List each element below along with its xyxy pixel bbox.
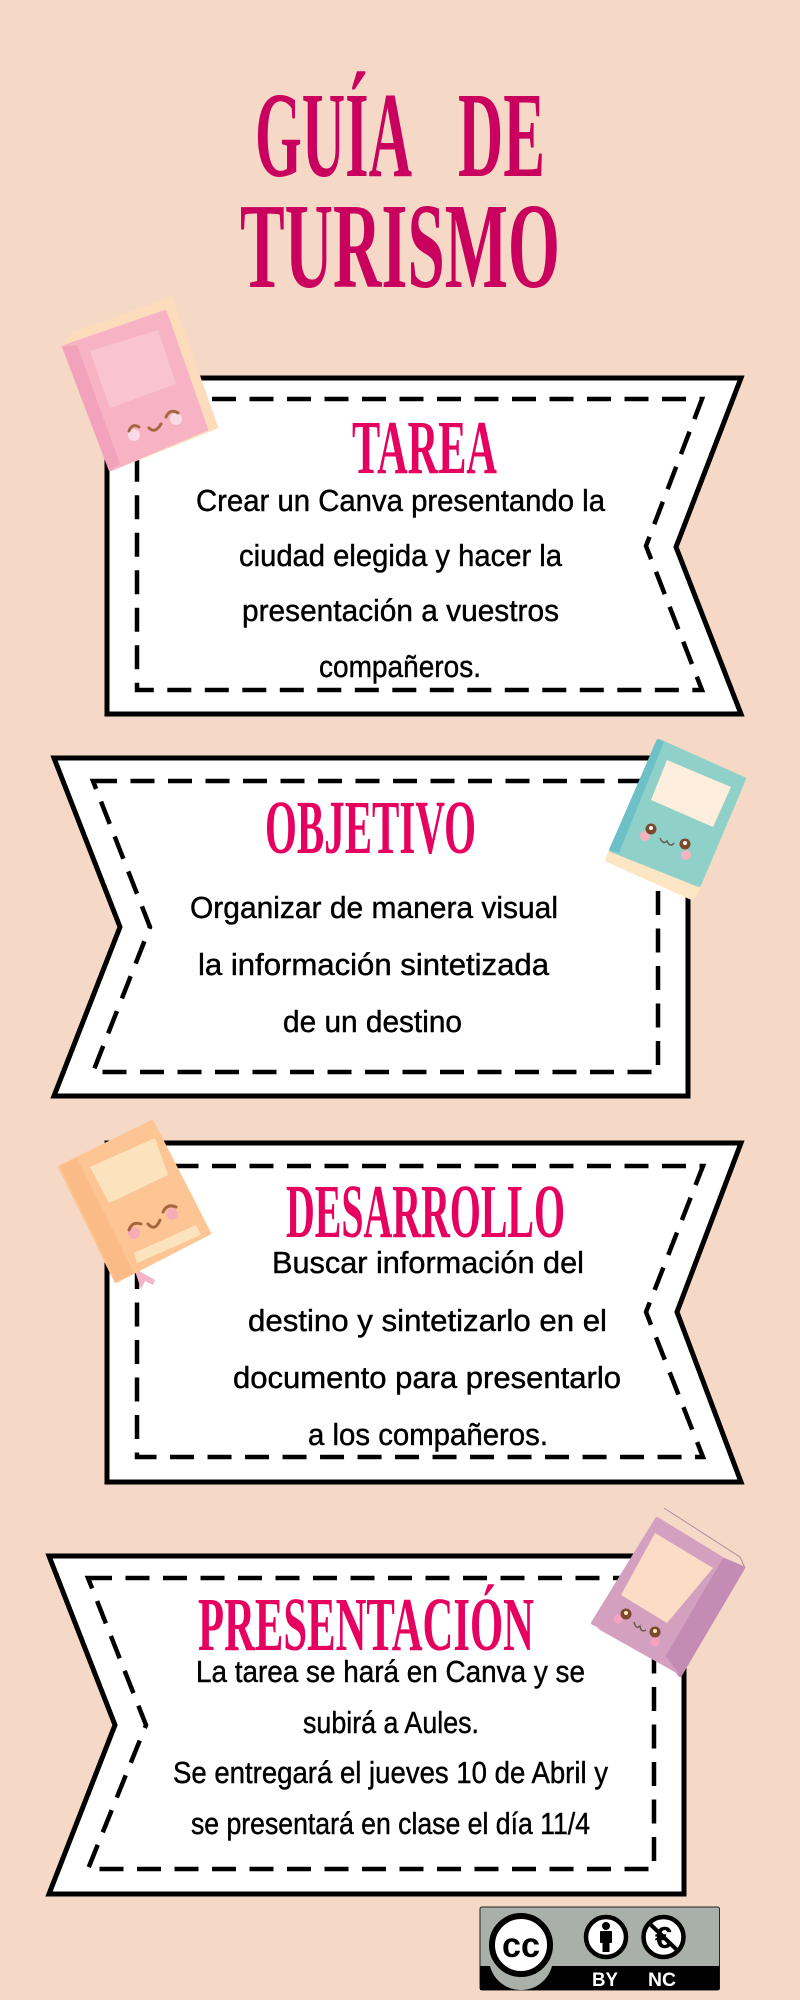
icon: orange book bbox=[60, 1122, 209, 1289]
icon: pink book bbox=[62, 299, 216, 471]
text block: tarea: compañeros. bbox=[319, 649, 481, 684]
cc logo: cc bbox=[502, 1926, 540, 1965]
nc icon bbox=[644, 1917, 684, 1957]
panel: presentacion bbox=[49, 1556, 684, 1894]
title: GUÍA bbox=[255, 68, 412, 203]
text block: presentacion: Se entregará el jueves 10 de Abril y bbox=[173, 1755, 608, 1790]
title bbox=[240, 68, 560, 314]
text block: desarrollo: destino y sintetizarlo en el bbox=[248, 1303, 607, 1338]
icon: purple book bbox=[593, 1508, 745, 1675]
text block: presentacion bbox=[173, 1654, 608, 1841]
panel: objetivo bbox=[54, 758, 688, 1096]
text block: presentacion: La tarea se hará en Canva y se bbox=[196, 1654, 585, 1689]
heading: tarea: TAREA bbox=[352, 406, 497, 490]
text block: presentacion: subirá a Aules. bbox=[303, 1705, 479, 1740]
icon: teal book bbox=[607, 739, 744, 898]
panel: desarrollo bbox=[107, 1143, 741, 1482]
panel: tarea bbox=[107, 378, 741, 714]
licence labels: BY bbox=[592, 1970, 618, 1991]
text block: objetivo: Organizar de manera visual bbox=[190, 890, 558, 925]
text block: tarea: Crear un Canva presentando la bbox=[196, 483, 606, 518]
text block: desarrollo: documento para presentarlo bbox=[233, 1360, 621, 1395]
text block: objetivo: de un destino bbox=[283, 1004, 462, 1039]
text block: objetivo bbox=[190, 890, 558, 1039]
text block: presentacion: se presentará en clase el día 11/4 bbox=[191, 1806, 590, 1841]
nc icon: € bbox=[655, 1920, 672, 1955]
text block: tarea: presentación a vuestros bbox=[242, 593, 559, 628]
heading: presentacion: PRESENTACIÓN bbox=[198, 1583, 534, 1667]
text block: desarrollo: Buscar información del bbox=[272, 1245, 584, 1280]
text block: desarrollo bbox=[233, 1245, 621, 1452]
title: DE bbox=[458, 68, 545, 203]
cc logo bbox=[490, 1916, 552, 1990]
licence labels bbox=[592, 1970, 676, 1991]
text block: tarea bbox=[196, 483, 606, 684]
licence labels: NC bbox=[648, 1970, 676, 1991]
heading: objetivo: OBJETIVO bbox=[265, 786, 476, 870]
text block: desarrollo: a los compañeros. bbox=[308, 1417, 548, 1452]
by icon bbox=[586, 1917, 626, 1957]
icon: creative commons badge bbox=[480, 1907, 720, 1991]
text block: tarea: ciudad elegida y hacer la bbox=[239, 538, 563, 573]
text block: objetivo: la información sintetizada bbox=[198, 947, 550, 982]
